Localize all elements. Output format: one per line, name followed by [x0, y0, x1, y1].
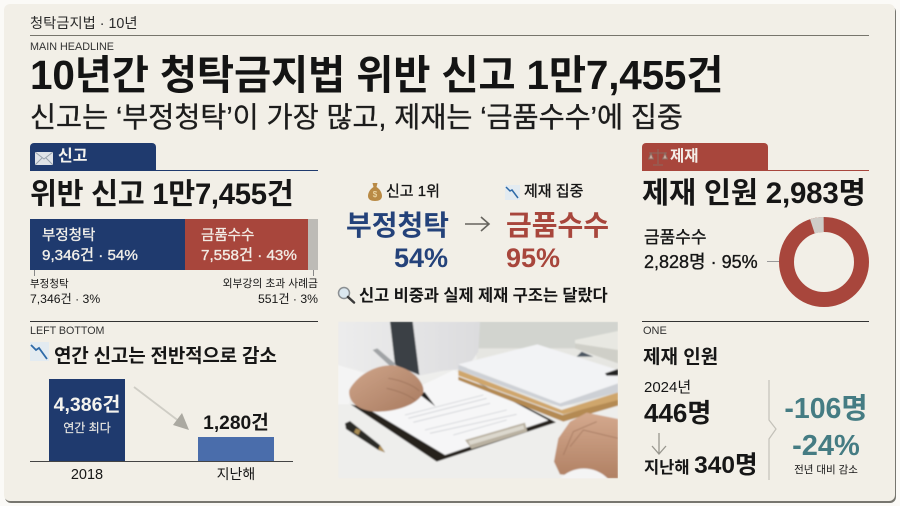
chart heading: 연간 신고는 전반적으로 감소 — [54, 346, 277, 367]
label: 2024: 2024년 — [644, 379, 691, 396]
insight: 신고 비중과 실제 제재 구조는 달랐다 — [359, 287, 608, 305]
panel: reports: 551건 · 3% — [258, 292, 318, 306]
panel: reports: 7,346건 · 3% — [30, 292, 100, 306]
total reports: 위반 신고 1만7,455건 — [30, 178, 293, 211]
panel: reports: 9,346건 · 54% — [42, 247, 138, 264]
bracket divider — [768, 380, 776, 480]
bar: 2018 — [49, 379, 125, 461]
shirt — [392, 322, 480, 375]
section label: ONE — [643, 325, 667, 337]
tab label: 신고 — [58, 148, 87, 165]
label: sanction focus: 제재 집중 — [524, 183, 583, 200]
big: 95%: 95% — [506, 243, 560, 273]
total sanctions: 제재 인원 2,983명 — [642, 177, 866, 210]
down arrow — [652, 433, 666, 455]
section label: LEFT BOTTOM — [30, 325, 104, 337]
table pen — [345, 421, 385, 452]
tab: reports — [30, 143, 156, 170]
clipboard — [350, 382, 556, 462]
bar: gifts — [185, 219, 308, 270]
bar value: last year: 1,280건 — [203, 413, 269, 434]
icon: scales — [648, 149, 668, 166]
value: 446: 446명 — [644, 398, 711, 428]
hand pen — [373, 348, 396, 367]
panel: annual reports — [30, 325, 293, 483]
delta caption: 전년 대비 감소 — [794, 464, 858, 476]
bar: other — [308, 219, 318, 270]
icon: money bag — [368, 183, 382, 201]
clasped hands — [554, 413, 618, 478]
panel: comparison — [338, 183, 609, 305]
delta: percent: -24% — [792, 430, 860, 462]
label: top report: 신고 1위 — [386, 183, 440, 200]
title: 10년간 청탁금지법 위반 신고 1만7,455건 — [30, 52, 723, 98]
arrow — [465, 216, 490, 232]
panel: sanctions — [642, 143, 869, 307]
photo: signing document — [338, 322, 618, 478]
baseline — [30, 461, 293, 462]
panel: reports: 7,558건 · 43% — [201, 247, 297, 264]
bar value: 2018: 4,386건 — [54, 394, 120, 416]
value: last year: 지난해 340명 — [644, 452, 758, 479]
axis label: last year: 지난해 — [217, 466, 255, 482]
big: gifts: 금품수수 — [506, 210, 609, 241]
section label: MAIN HEADLINE — [30, 41, 114, 53]
leader line — [767, 261, 779, 262]
small label left: 부정청탁 — [30, 278, 69, 290]
icon: magnifier — [338, 286, 356, 304]
clip — [465, 423, 527, 449]
big: improper solicitation: 부정청탁 — [346, 210, 449, 241]
small label right: 외부강의 초과 사례금 — [223, 278, 318, 290]
trend arrow — [134, 386, 189, 430]
tick marks — [34, 270, 35, 276]
icon: falling chart — [30, 342, 49, 361]
panel: annual reports: 연간 최다 — [63, 421, 111, 435]
delta: people: -106명 — [784, 393, 868, 425]
bar label: improper solicitation: 부정청탁 — [42, 228, 95, 244]
icon: falling chart — [505, 185, 520, 200]
icon: money bag: $ — [373, 190, 378, 199]
subtitle: 신고는 ‘부정청탁’이 가장 많고, 제재는 ‘금품수수’에 집중 — [30, 101, 683, 133]
donut chart — [779, 217, 869, 307]
axis label: 2018: 2018 — [71, 467, 103, 483]
big: 54%: 54% — [394, 243, 448, 273]
document stack — [458, 377, 618, 422]
heading: 제재 인원 — [643, 347, 718, 368]
bar: improper solicitation — [30, 219, 185, 270]
icon: envelope — [35, 152, 53, 165]
tab label: 제재 — [670, 148, 699, 165]
panel: sanctions: 2,828명 · 95% — [644, 252, 758, 272]
donut label: 금품수수 — [644, 228, 707, 247]
kicker: 청탁금지법 · 10년 — [30, 16, 138, 32]
tab: sanctions — [642, 143, 768, 170]
writing hand — [349, 365, 423, 412]
bar: last year — [198, 437, 274, 461]
bar label: gifts: 금품수수 — [201, 228, 254, 244]
panel: reports — [30, 143, 318, 306]
back stack — [574, 331, 618, 348]
panel: sanctioned people — [643, 325, 868, 480]
